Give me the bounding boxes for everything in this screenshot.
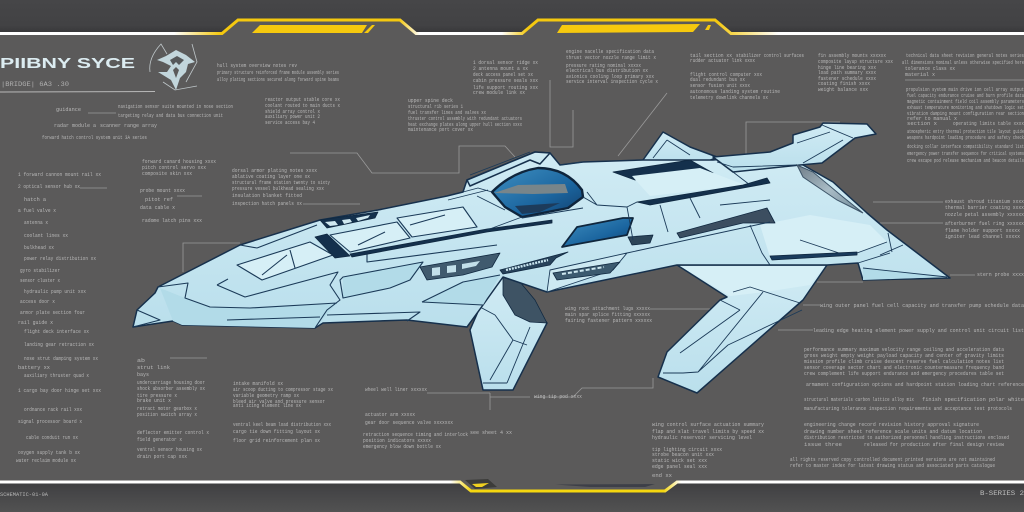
text block: left column list: a fuel valve x [18, 208, 56, 214]
text block: nose notes: ablative coating layer one xx [232, 174, 310, 180]
text block: upper middle specs: service interval inspection cycle x [566, 79, 658, 85]
title rule [0, 90, 155, 93]
text block: lower left notes: retract motor gearbox x [137, 406, 197, 412]
text block: top left notes: primary structure reinforced frame module assembly series [217, 70, 339, 76]
text block: lower right technical notes: crew complement life support endurance and emergency procedures table set [804, 371, 1004, 377]
text block: top centre notes: cabin pressure seals xxx [473, 78, 538, 84]
text block: top left notes: reactor output stable core xx [265, 97, 340, 103]
leader lines [80, 80, 1024, 410]
text block: top centre notes: life support routing xxx [473, 85, 538, 91]
text block: lower right technical notes [790, 347, 1024, 469]
text block: lower left notes: deflector emitter control x [137, 430, 209, 436]
text block: lower left notes: tire pressure x [137, 393, 177, 399]
text block: lower left notes: shock absorber assembly xx [137, 386, 205, 392]
text block: lower centre notes: ventral keel beam load distribution xxx [233, 422, 331, 428]
text block: lower centre notes: wheel well liner xxxxxx [365, 387, 427, 393]
text block: far right technical notes: refer to manual x [907, 116, 957, 122]
text block: lower centre notes: air scoop ducting to compressor stage xx [233, 387, 333, 393]
ship: main hull [133, 152, 950, 328]
text block: right side callouts [813, 199, 1024, 334]
ship: tail fin [653, 123, 876, 185]
ship: dark hull slot [315, 234, 350, 258]
text block: left column list: nose strut damping system xx [24, 356, 98, 362]
text block: left column list: oxygen supply tank b xx [18, 450, 80, 456]
text block: bottom centre notes: static wick set xxx [652, 458, 707, 464]
text block: bottom centre notes [652, 422, 764, 479]
text block: top left notes: alloy plating sections secured along forward spine beams [217, 77, 339, 83]
text block: top right specs: telemetry downlink channels xx [690, 95, 768, 101]
text block: left column list: hatch a [24, 197, 46, 203]
text block: lower right technical notes: released for production after final design review [864, 442, 1004, 448]
text block: lower left notes: brake unit x [137, 398, 171, 404]
text block: strut and wing callouts: wing tip pod xxxx [534, 394, 582, 400]
title: |BRIDGE| 6A3 .30 [1, 81, 69, 88]
text block: lower centre notes: emergency blow down bottle xx [363, 444, 441, 450]
text block: top right specs: stabilizer control surfaces [736, 53, 804, 59]
text block: far right technical notes [902, 53, 1024, 164]
text block: left column list: bulkhead xx [24, 245, 54, 251]
text block: right side callouts: leading edge heating element power supply and control unit circuit list [813, 328, 1024, 334]
text block: lower right technical notes: engineering change record revision history approval signature [804, 422, 979, 428]
text block: lower centre notes: actuator arm xxxxx [365, 412, 415, 418]
text block: left column list: water reclaim module xx [16, 458, 76, 464]
text block: lower left notes: field generator x [137, 437, 182, 443]
text block: lower left notes: ab [137, 358, 145, 364]
text block: lower centre notes: position indicators xxxxx [363, 438, 431, 444]
text block: lower right technical notes: finish specification polar white [922, 397, 1024, 403]
text block: top right specs: rudder actuator link xxxx [690, 58, 755, 64]
text block: lower right technical notes: structural materials carbon lattice alloy mix [804, 397, 914, 403]
bottom frame line [0, 482, 1024, 491]
ship: rear panels [627, 198, 947, 277]
text block: top left notes: shield array control x [265, 109, 320, 115]
text block: bottom centre notes: wing control surface actuation summary [652, 422, 764, 428]
text block: navigation labels: guidance [56, 107, 81, 113]
text block: lower right technical notes: performance summary maximum velocity range ceiling and acceleration data [804, 347, 1004, 353]
text block: right side callouts: wing outer panel fuel cell capacity and transfer pump schedule data [820, 303, 1024, 309]
text block: lower centre notes: retraction sequence timing and interlock [363, 432, 468, 438]
text block: left column list: gyro stabilizer [20, 268, 60, 274]
text block: bottom centre notes: flap and slat travel limits by speed xx [652, 429, 764, 435]
text block: upper middle specs: avionics cooling loop primary xxx [566, 74, 654, 80]
text block: top right specs: hinge line bearing xxx [818, 65, 876, 71]
text block: top left notes: hull system overview notes rev [217, 63, 297, 69]
text block: top centre notes: structural rib series 1 [408, 104, 463, 110]
text block: lower left notes: bays [137, 372, 149, 378]
text block: bottom centre notes: end xx [652, 473, 672, 479]
ship: long dark band [350, 220, 552, 257]
ship: upper deck panels [448, 160, 770, 230]
text block: nose notes: insulation blanket fitted [232, 193, 302, 199]
text block: nose notes: forward canard housing xxxx [142, 159, 216, 165]
text block: bottom centre notes: hydraulic reservoir servicing level [652, 435, 752, 441]
text block: top left notes: auxiliary power unit 2 [265, 114, 320, 120]
text block: top right specs [690, 53, 893, 101]
footer right label: B-SERIES 2 [980, 490, 1024, 497]
text block: lower centre notes: gear door sequence valve xxxxxxx [365, 420, 453, 426]
ship: rear canopy [797, 165, 863, 213]
text block: top right specs: autonomous landing system routine [690, 89, 780, 95]
spaceship illustration [133, 123, 950, 393]
text block: lower centre notes [233, 381, 512, 450]
text block: lower centre notes: bleed air valve and pressure sensor [233, 399, 325, 405]
text block: lower centre notes: see sheet 4 xx [470, 430, 512, 436]
text block: upper middle specs: electrical bus distribution xx [566, 68, 648, 74]
text block: navigation labels: forward hatch control system unit 3A series [42, 135, 147, 141]
text block: top right specs: coating finish xxxx [818, 81, 870, 87]
text block: nose notes: data cable x [140, 205, 175, 211]
title [0, 55, 135, 88]
text block: navigation labels: radar module a [54, 123, 96, 129]
text block: top right specs: flight control computer xxx [690, 72, 762, 78]
text block: left column list: auxiliary thruster quad x [24, 373, 89, 379]
text block: lower right technical notes: mission profile climb cruise descent reserve fuel calculation notes list [804, 359, 1004, 365]
text block: lower left notes: strut link [137, 365, 170, 371]
text block: lower right technical notes: sensor coverage sector chart and electronic countermeasure frequency band [804, 365, 1004, 371]
text block: top right specs: fin assembly mounts xxxxxx [818, 53, 886, 59]
text block: bottom centre notes: strobe beacon unit xxx [652, 452, 714, 458]
text block: lower right technical notes: all rights reserved copy controlled document printed versions are not maintained [790, 457, 995, 463]
text block: top left notes [217, 63, 340, 126]
text block: left column list: armor plate section four [20, 310, 85, 316]
text block: nose notes: composite skin xxx [142, 171, 192, 177]
text block: top right specs: tail section xx [690, 53, 732, 59]
text block: top centre notes: fuel transfer lines and valves xx [408, 110, 486, 116]
ship: side grille [500, 252, 568, 274]
text block: nose notes: radome latch pins xxx [142, 218, 202, 224]
text block: navigation labels: scanner range array [100, 123, 157, 129]
text block: right side callouts: flame holder support xxxxx [945, 228, 1020, 234]
text block: top right specs: dual redundant bus xx [690, 77, 745, 83]
text block: nose notes: inspection hatch panels xx [232, 201, 302, 207]
text block: left column list: access door x [20, 299, 55, 305]
top frame line [0, 20, 1024, 34]
text block: upper middle specs [566, 49, 658, 85]
text block: top right specs: sensor fusion unit xxxx [690, 83, 750, 89]
text block: left column list: hydraulic pump unit xxx [24, 289, 86, 295]
title: PIIBNY SYCE [0, 55, 135, 72]
text block: left column list: ordnance rack rail xxx [24, 407, 82, 413]
text block: top centre notes: 1 dorsal sensor ridge xx [473, 60, 538, 66]
text block: top centre notes: maintenance port cover xx [408, 127, 473, 133]
text block: top left notes: service access bay 4 [265, 120, 315, 126]
text block: top centre notes: upper spine deck [408, 98, 453, 104]
text block: left column list: flight deck interface xx [24, 329, 89, 335]
text block: left column list: battery xx [18, 365, 50, 371]
text block: nose notes: probe mount xxxx [140, 188, 185, 194]
text block: nose notes: pitot ref [145, 197, 173, 203]
text block: right side callouts: stern probe xxxx [977, 272, 1024, 278]
text block: upper middle specs: engine nacelle specification data [566, 49, 654, 55]
ship: hull shading [160, 207, 947, 328]
icon: emblem [150, 44, 197, 90]
text block: nose notes: dorsal armor plating notes xxxx [232, 168, 317, 174]
text block: lower centre notes: floor grid reinforcement plan xx [233, 438, 320, 444]
text block: lower right technical notes: refer to master index for latest drawing status and associated parts catalogue [790, 463, 995, 469]
text block: far right technical notes: tolerance class xx [905, 66, 955, 72]
ship: side window [562, 218, 633, 247]
text block: nose notes [140, 159, 330, 224]
text block: bottom centre notes: tip lighting circuit xxxx [652, 447, 722, 453]
text block: right side callouts: igniter lead channel xxxxx [945, 234, 1020, 240]
text block: lower left notes: undercarriage housing door [137, 380, 205, 386]
footer band [0, 478, 1024, 512]
text block: lower right technical notes: gross weight empty weight payload capacity and center of gravity limits [804, 353, 1004, 359]
yellow footer accent [465, 479, 655, 489]
text block: navigation labels [42, 104, 233, 141]
text block: left column list [16, 172, 101, 464]
ship: vertical fin [643, 132, 717, 165]
text block: left column list: power relay distribution xx [24, 256, 96, 262]
text block: navigation labels: targeting relay and data bus connection unit [118, 113, 223, 119]
text block: left column list: antenna x [24, 220, 48, 226]
text block: lower centre notes: cargo tie down fitting layout xx [233, 429, 320, 435]
text block: lower centre notes: variable geometry ramp xx [233, 393, 299, 399]
ship: landing strut [470, 277, 547, 390]
text block: lower left notes [137, 358, 209, 460]
footer left label: SCHEMATIC-01-0A [0, 491, 49, 498]
text block: left column list: cable conduit run xx [26, 435, 78, 441]
text block: nose notes: pressure vessel bulkhead sealing xxx [232, 186, 324, 192]
text block: lower centre notes: intake manifold xx [233, 381, 283, 387]
text block: strut and wing callouts: fairing fastener pattern xxxxxx [565, 318, 652, 324]
text block: top centre notes: heat exchange plates along upper hull section xxxx [408, 122, 522, 128]
text block: top centre notes: crew module link xx [473, 90, 525, 96]
text block: left column list: 1 forward cannon mount rail xx [18, 172, 101, 178]
text block: top centre notes: 2 antenna mount a xx [473, 66, 528, 72]
ship: cockpit canopy [492, 168, 583, 217]
text block: navigation labels: navigation sensor suite mounted in nose section [118, 104, 233, 110]
text block: far right technical notes: material x [905, 72, 935, 78]
text block: left column list: rail guide x [18, 320, 53, 326]
text block: top right specs: load path summary xxxx [818, 70, 876, 76]
ship: nose panel lines [133, 207, 500, 328]
text block: top right specs: fastener schedule xxxx [818, 76, 876, 82]
text block: upper middle specs: pressure rating nominal xxxxx [566, 63, 641, 69]
text block: nose notes: structural frame station twenty to sixty [232, 180, 330, 186]
yellow header bars [252, 24, 711, 33]
text block: upper middle specs: thrust vector nozzle range limit x [566, 55, 656, 61]
text block: top centre notes [408, 60, 538, 133]
ship: dorsal fin [467, 152, 550, 186]
text block: left column list: landing gear retraction xx [24, 342, 94, 348]
text block: top right specs: weight balance xxx [818, 87, 868, 93]
ship: front grille [420, 253, 500, 280]
text block: top right specs: composite layup structure xxx [818, 59, 893, 65]
text block: left column list: coolant lines xx [24, 233, 68, 239]
text block: lower left notes: drain port cap xxx [137, 454, 187, 460]
text block: nose notes: pitch control servo xxx [142, 165, 206, 171]
text block: top centre notes: thruster control assembly with redundant actuators [408, 116, 522, 122]
text block: left column list: 2 optical sensor hub xx [18, 184, 80, 190]
text block: lower left notes: ventral sensor housing xx [137, 447, 202, 453]
text block: left column list: signal processor board x [18, 419, 82, 425]
text block: strut and wing callouts [534, 306, 652, 400]
text block: lower right technical notes: issue three [804, 442, 842, 448]
text block: strut and wing callouts: main spar splice fitting xxxxxx [565, 312, 650, 318]
text block: lower right technical notes: drawing number sheet reference scale units and datum location [804, 429, 982, 435]
text block: strut and wing callouts: wing root attachment lugs xxxxx [565, 306, 650, 312]
text block: lower centre notes: anti icing element line xx [233, 403, 301, 409]
text block: top centre notes: deck access panel set xx [473, 72, 533, 78]
text block: left column list: 1 cargo bay door hinge set xxx [18, 388, 101, 394]
text block: lower left notes: position switch array x [137, 412, 197, 418]
text block: left column list: sensor cluster x [20, 278, 60, 284]
text block: far right technical notes: section x [907, 121, 937, 127]
ship: lower hull panel [547, 253, 627, 292]
text block: bottom centre notes: edge panel seal xxx [652, 464, 707, 470]
header band [0, 0, 1024, 36]
text block: top left notes: coolant routed to main ducts x [265, 103, 340, 109]
ship: lower right wing [658, 265, 827, 393]
ship: panel logo plate [320, 212, 378, 228]
